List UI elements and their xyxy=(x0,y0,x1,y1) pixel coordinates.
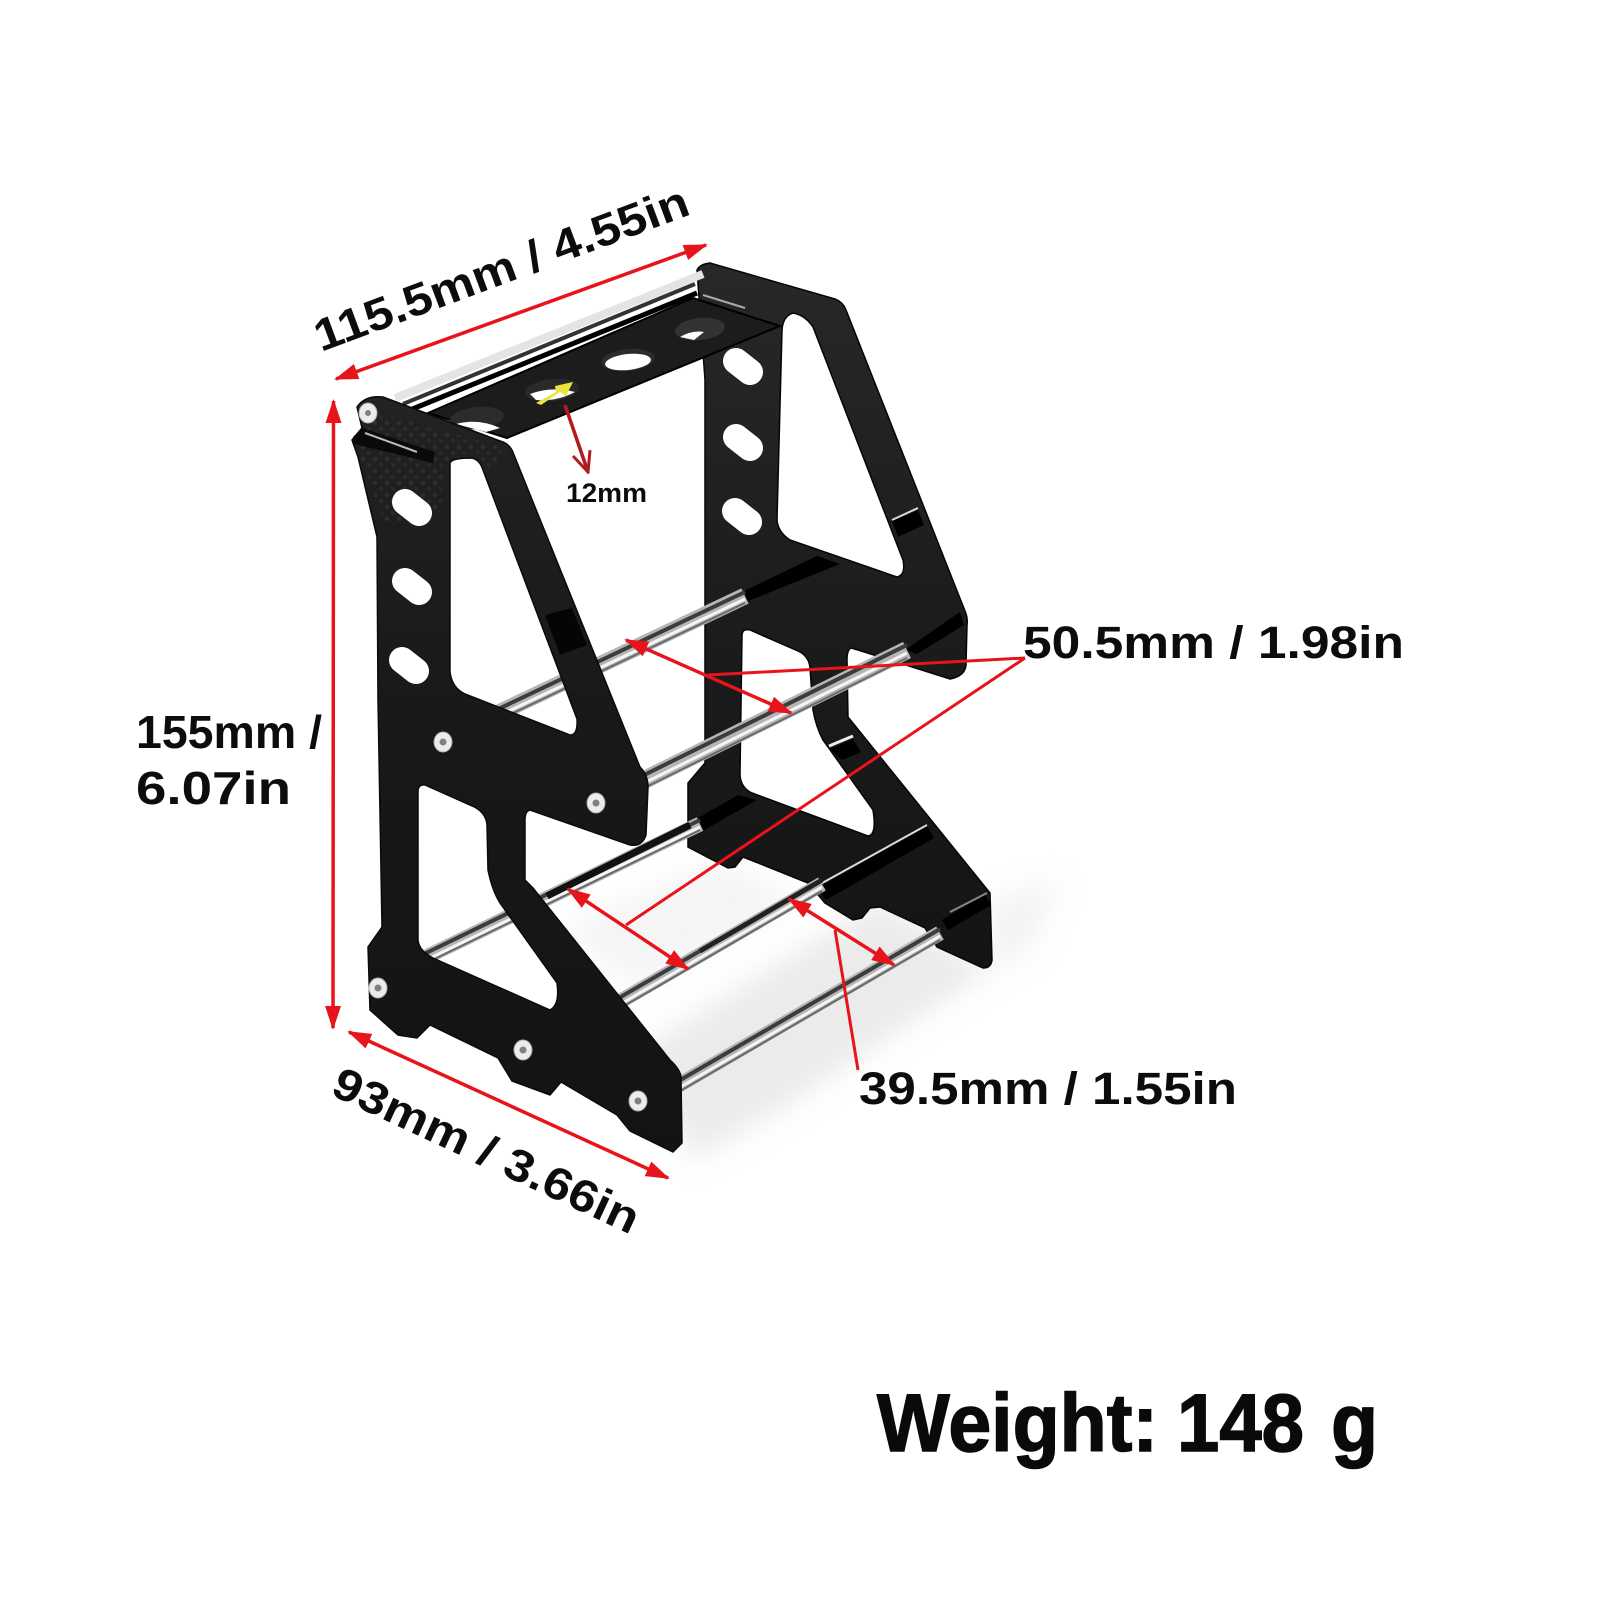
top rod xyxy=(395,274,703,410)
label: rod spacing 50.5mm: 50.5mm / 1.98in xyxy=(1023,617,1404,668)
label: depth: 93mm / 3.66in xyxy=(325,1057,648,1244)
floor shadow xyxy=(560,860,1060,1160)
front plate gloss xyxy=(545,608,587,655)
label: height: 6.07in xyxy=(136,762,291,814)
top plate with holes xyxy=(428,295,780,438)
weight label: 148 xyxy=(1177,1378,1304,1469)
arrow: upper rod spacing xyxy=(626,640,791,713)
label: height xyxy=(136,706,322,814)
arrow: depth xyxy=(349,1032,668,1178)
dimension: hole diameter xyxy=(565,405,647,508)
back plate gloss xyxy=(660,508,988,925)
carbon texture on front plate top xyxy=(356,412,505,525)
dimension: rod spacing 50.5mm xyxy=(568,617,1404,969)
product: tool rack stand xyxy=(352,263,992,1152)
label: hole diameter: 12mm xyxy=(566,478,647,508)
dimension: height xyxy=(136,401,334,1028)
leader line xyxy=(835,930,858,1070)
weight label: Weight: xyxy=(877,1378,1158,1469)
middle hole with yellow mark xyxy=(524,376,580,405)
dimension: depth xyxy=(325,1032,668,1244)
front plate slots xyxy=(402,502,419,671)
dimension: rod spacing 39.5mm xyxy=(789,899,1237,1114)
dimension: top width xyxy=(307,176,706,379)
arrow: front rod spacing xyxy=(789,899,894,965)
screws xyxy=(359,403,647,1111)
front plate xyxy=(352,397,682,1152)
arrow: width xyxy=(336,245,706,379)
screw centres xyxy=(365,410,642,1104)
label: height: 155mm / xyxy=(136,706,322,758)
arrow: height xyxy=(331,401,335,1028)
weight label xyxy=(877,1378,1378,1469)
label: width: 115.5mm / 4.55in xyxy=(307,176,696,361)
leader lines xyxy=(626,658,1025,925)
weight label: g xyxy=(1331,1378,1378,1469)
arrow: lower rod spacing xyxy=(568,889,688,969)
top latch xyxy=(353,428,435,463)
back plate slots xyxy=(735,361,750,522)
arrow: hole diameter xyxy=(565,405,588,472)
rods xyxy=(420,592,940,1097)
back plate xyxy=(688,263,992,968)
label: rod spacing 39.5mm: 39.5mm / 1.55in xyxy=(859,1063,1237,1114)
